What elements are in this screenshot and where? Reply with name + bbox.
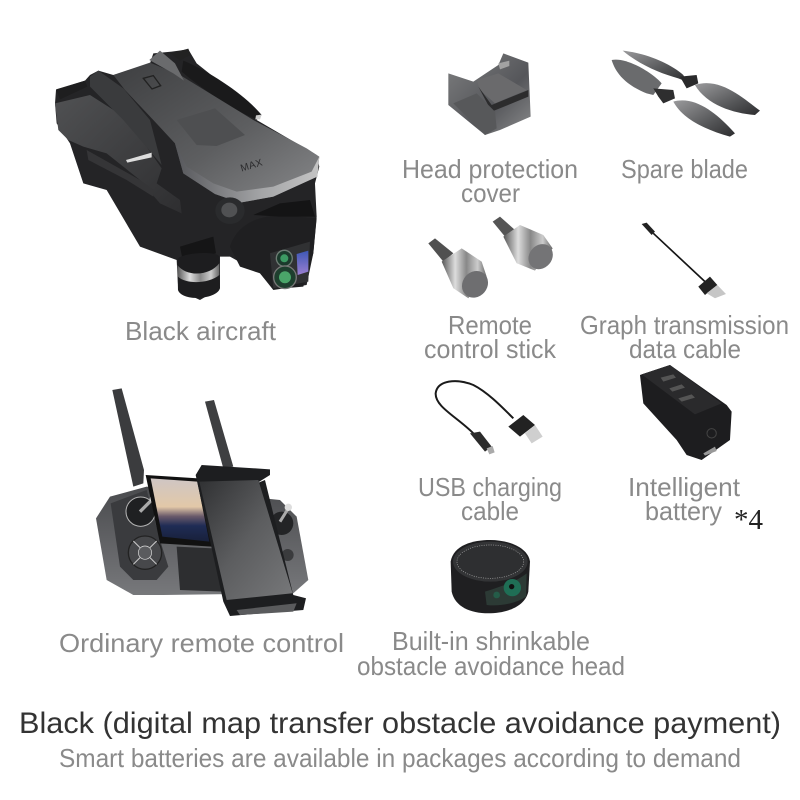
tablet holder <box>196 465 306 616</box>
label: black aircraft: Black aircraft <box>125 316 277 346</box>
model text marks: MAX <box>239 157 264 175</box>
title: Black (digital map transfer obstacle avoidance payment) <box>19 707 781 740</box>
grip inner panel <box>111 490 168 580</box>
front motor and leg <box>177 237 220 298</box>
subtitle: Smart batteries are available in packages according to demand <box>59 743 741 773</box>
label: obstacle avoidance head: obstacle avoidance head <box>357 651 625 681</box>
controller body <box>96 487 308 595</box>
left joystick <box>126 495 157 526</box>
label: intelligent battery: battery <box>645 496 722 526</box>
gimbal camera <box>230 200 317 289</box>
label: graph transmission data cable: Graph transmission <box>580 310 789 340</box>
label: graph transmission data cable <box>580 310 789 364</box>
right stick <box>493 217 558 274</box>
right joystick <box>270 504 294 561</box>
label: remote control stick <box>424 310 557 364</box>
label: graph transmission data cable: data cable <box>629 334 741 364</box>
accessory: obstacle avoidance head <box>451 540 530 613</box>
left stick <box>428 238 493 303</box>
label: ordinary remote control: Ordinary remote control <box>59 628 344 658</box>
phone screen <box>146 475 212 547</box>
model text marks <box>143 76 264 175</box>
label: obstacle avoidance head: Built-in shrinkable <box>392 626 590 656</box>
quantity: times four: *4 <box>734 505 763 536</box>
label: intelligent battery: Intelligent <box>628 472 741 502</box>
accessory: intelligent battery <box>640 365 732 460</box>
illustration: black aircraft <box>55 49 319 300</box>
illustration: remote control <box>96 388 308 616</box>
rear propeller <box>171 49 262 119</box>
main top shell <box>113 63 319 203</box>
front sensor <box>215 197 245 224</box>
accessory: USB charging cable <box>436 381 543 454</box>
side label strip <box>87 150 153 197</box>
accessory: spare blade <box>612 51 760 137</box>
propeller clips <box>126 153 152 163</box>
label: head protection cover <box>402 154 578 208</box>
lower centre details <box>177 547 223 592</box>
silver front rim <box>175 143 319 203</box>
left shoulder <box>90 71 162 165</box>
label: spare blade: Spare blade <box>621 154 748 184</box>
label: obstacle avoidance head <box>357 626 625 681</box>
directional pad <box>128 536 162 569</box>
left propeller tip <box>56 81 87 99</box>
hatch panel <box>177 108 245 146</box>
label: head protection cover: Head protection <box>402 154 578 184</box>
label: USB charging cable <box>418 472 562 526</box>
label: remote control stick: Remote <box>448 310 532 340</box>
label: intelligent battery <box>628 472 741 526</box>
left folded arm <box>55 95 182 213</box>
label: remote control stick: control stick <box>424 334 557 364</box>
label: USB charging cable: cable <box>461 496 519 526</box>
accessory: head protection cover <box>448 53 531 135</box>
accessory: graph transmission data cable <box>642 223 726 298</box>
label: USB charging cable: USB charging <box>418 472 562 502</box>
accessory: remote control sticks <box>428 217 558 303</box>
label: head protection cover: cover <box>461 178 520 208</box>
silhouette <box>55 49 319 300</box>
antennas <box>112 388 233 487</box>
rear motor bump <box>149 51 184 81</box>
